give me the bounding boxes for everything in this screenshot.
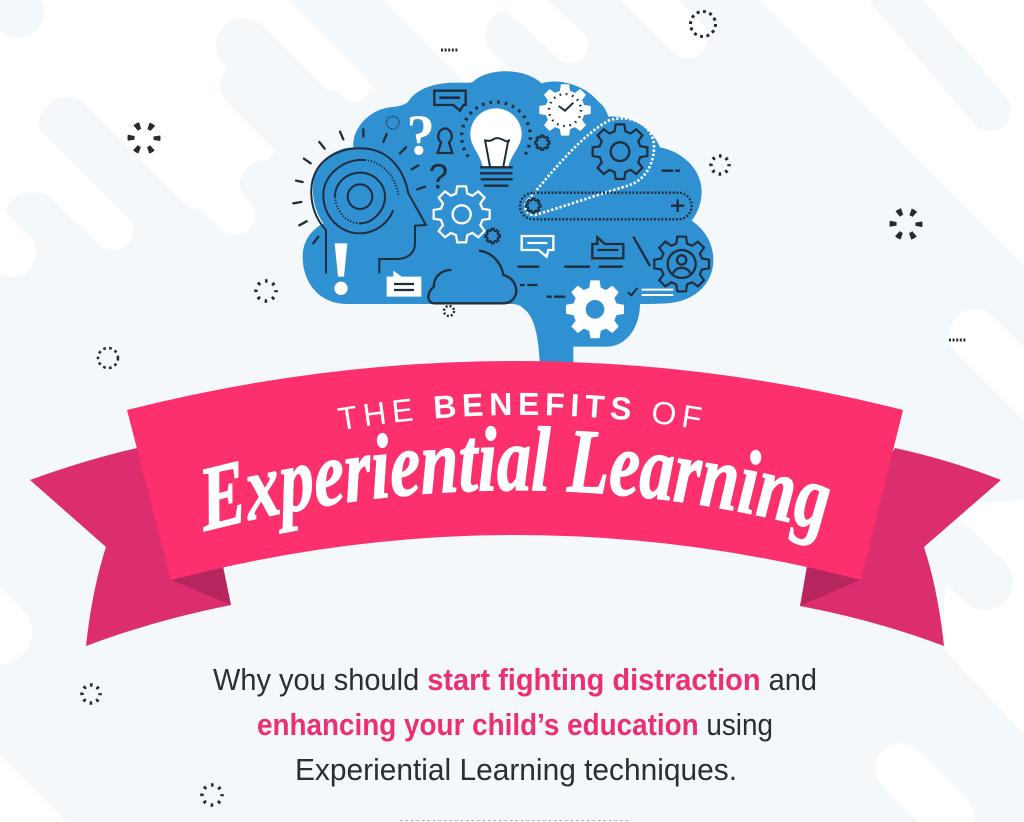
dotted white loop: [525, 118, 654, 215]
heading: experiential learning: Experiential Learning: [202, 426, 830, 546]
spark small right: [711, 156, 729, 174]
brain illustration: [293, 71, 713, 365]
plus sign: [671, 199, 684, 212]
small gear b: [485, 229, 500, 243]
dark question mark: ?: [429, 158, 448, 197]
person gear: [654, 237, 709, 291]
dotted ring top: [690, 12, 716, 36]
spark large right: [893, 211, 919, 237]
dark folder: [592, 237, 623, 258]
dash lines: [517, 237, 650, 297]
small dash: [662, 167, 680, 174]
thought rays: [293, 129, 425, 243]
exclamation mark: [334, 243, 348, 295]
chat bubble top: [434, 91, 466, 111]
keyhole: [438, 128, 452, 153]
subtitle line 2: enhancing your child’s education using: [257, 707, 773, 742]
dotted pill: [520, 193, 692, 219]
light bulb: [462, 102, 530, 186]
head profile: [311, 148, 426, 273]
main ribbon: [127, 361, 903, 580]
small gear c: [526, 198, 541, 213]
heading: the benefits of: THE BENEFITS OF: [337, 392, 702, 430]
ribbon banner: [30, 361, 1001, 646]
brain silhouette: [303, 71, 713, 365]
spark lower left: [82, 685, 100, 703]
white outline gear: [434, 186, 490, 242]
cloud: [428, 251, 516, 303]
white gear filled: [566, 280, 624, 338]
dotted ring left: [98, 348, 118, 368]
subtitle line 3: Experiential Learning techniques.: [295, 752, 737, 787]
spark large left: [131, 125, 157, 151]
right ribbon fold: [800, 566, 860, 606]
white note with lines: [387, 271, 421, 297]
white question mark: ?: [407, 105, 435, 167]
spark bottom: [202, 785, 222, 805]
subtitle line 1: Why you should start fighting distraction and: [213, 662, 817, 697]
left ribbon tail: [30, 448, 231, 646]
left ribbon fold: [171, 566, 231, 605]
dots right: [949, 338, 966, 342]
arc paths: [320, 415, 725, 434]
check list: [628, 288, 673, 295]
dotted ring: [386, 116, 399, 129]
subtitle: [213, 662, 817, 787]
dots top: [441, 48, 458, 52]
small gears: [485, 135, 550, 243]
spark small: [256, 281, 276, 301]
white chat bubble: [522, 236, 553, 257]
small gear a: [535, 135, 550, 150]
small spark under brain: [444, 306, 454, 316]
clock gear: [539, 84, 591, 136]
dark gear top right: [593, 124, 647, 179]
dotted rule bottom: [400, 820, 628, 822]
right ribbon tail: [800, 448, 1001, 646]
